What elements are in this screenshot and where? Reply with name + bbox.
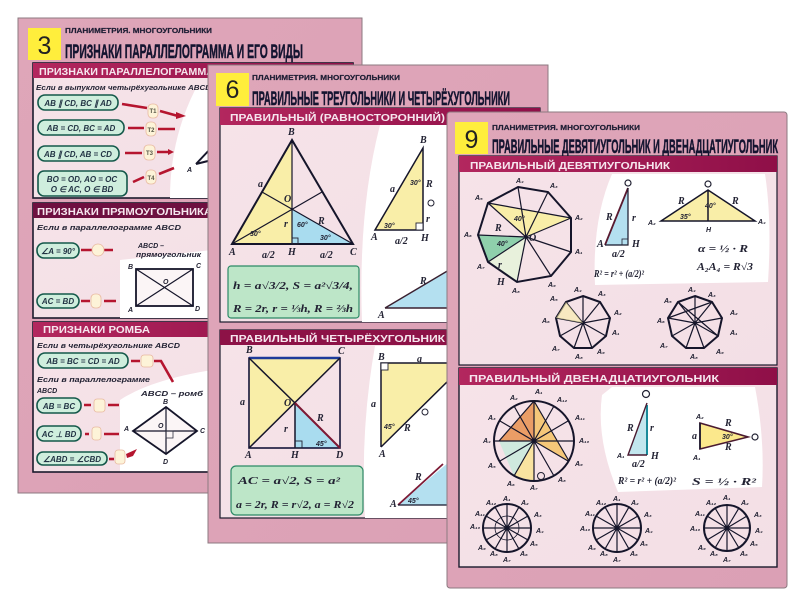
condition pill 3: AC ⊥ BD xyxy=(41,430,76,439)
right triangle diagram: A xyxy=(596,239,604,250)
small nonagon 1: A₅ xyxy=(549,296,558,303)
rhombus diagram: O xyxy=(158,423,164,430)
arrow 3 xyxy=(125,145,174,160)
formulas box xyxy=(228,266,359,318)
small blue triangle xyxy=(389,462,449,510)
small dodecagon 3: A₄ xyxy=(754,528,763,535)
small nonagon 1: A₉ xyxy=(596,349,605,356)
small dodecagon 3: A₂ xyxy=(740,500,749,507)
small nonagon 1: A₇ xyxy=(551,346,560,353)
small dodecagon 2: A₆ xyxy=(629,551,638,558)
square diagram: a xyxy=(240,397,245,408)
equilateral triangle diagram: C xyxy=(350,247,357,258)
arrow 2: T2 xyxy=(147,128,155,134)
formulas box: R = 2r, r = ⅓h, R = ⅔h xyxy=(232,304,354,315)
number badge 3 xyxy=(28,28,61,60)
isosceles triangle diagram: 40° xyxy=(704,202,716,210)
rectangle diagram: A xyxy=(127,307,133,314)
small dodecagon 2: A₄ xyxy=(644,528,653,535)
right triangle diagram: A xyxy=(370,232,378,243)
heading xyxy=(459,156,777,172)
isosceles triangle diagram: H xyxy=(706,227,712,234)
small dodecagon 3: A₁ xyxy=(722,495,731,502)
arrow xyxy=(85,427,119,440)
equilateral triangle diagram: a xyxy=(258,179,263,190)
equilateral triangle diagram: R xyxy=(317,216,325,227)
condition pill 2 xyxy=(37,294,79,308)
small nonagon 1: A₆ xyxy=(541,318,550,325)
condition pill 1 xyxy=(38,95,118,110)
poster subtitle: ПЛАНИМЕТРИЯ. МНОГОУГОЛЬНИКИ xyxy=(252,75,400,82)
small blue triangle: A xyxy=(389,499,397,510)
small blue triangle: A xyxy=(377,310,385,321)
small nonagon 2: A₆ xyxy=(656,318,665,325)
condition pill 4: ∠ABD = ∠CBD xyxy=(43,455,101,464)
arrow 3: T3 xyxy=(146,151,154,157)
condition pill 1 xyxy=(38,353,128,368)
nonagon diagram: H xyxy=(496,277,506,288)
condition text: Если в параллелограмме xyxy=(37,377,150,384)
number badge 9: 9 xyxy=(465,126,478,154)
number badge 3: 3 xyxy=(38,32,51,60)
nonagon diagram: A₁ xyxy=(574,249,583,256)
square diagram xyxy=(240,345,345,461)
small nonagon 2: A₉ xyxy=(715,349,724,356)
equilateral triangle diagram: 30° xyxy=(320,234,331,242)
isosceles triangle diagram xyxy=(692,414,758,488)
arrow 1 xyxy=(122,104,186,119)
isosceles triangle diagram: a xyxy=(692,431,697,442)
dodecagon diagram: A₇ xyxy=(529,485,538,492)
condition pill 2: AB = BC xyxy=(42,402,75,411)
heading xyxy=(220,108,540,125)
heading xyxy=(33,203,353,218)
right triangle diagram xyxy=(593,180,645,280)
small dodecagon 1: A₁ xyxy=(502,496,511,503)
condition pill 2 xyxy=(37,398,81,413)
dodecagon diagram: A₈ xyxy=(557,477,566,484)
square diagram: D xyxy=(335,450,343,461)
small blue triangle xyxy=(377,270,449,321)
formulas box xyxy=(231,466,363,515)
small dodecagon 3: A₃ xyxy=(753,512,762,519)
figure caption: ABCD – ромб xyxy=(140,390,204,398)
dodecagon diagram: A₅ xyxy=(487,463,496,470)
arrow 4 xyxy=(133,168,174,184)
heading: ПРАВИЛЬНЫЙ ЧЕТЫРЁХУГОЛЬНИК xyxy=(230,332,446,345)
small dodecagon 1: A₅ xyxy=(529,541,538,548)
nonagon diagram: R xyxy=(494,223,502,234)
small dodecagon 3: A₆ xyxy=(739,551,748,558)
right triangle diagram xyxy=(370,135,434,247)
isosceles triangle diagram: A₁ xyxy=(692,455,701,462)
formula: A₂A₄ = R√3 xyxy=(696,262,753,273)
dodecagon diagram: A₂ xyxy=(509,395,518,402)
small dodecagon 3: A₇ xyxy=(722,557,731,564)
right triangle diagram: a xyxy=(371,399,376,410)
nonagon diagram: A₉ xyxy=(547,282,556,289)
heading: ПРАВИЛЬНЫЙ ДЕВЯТИУГОЛЬНИК xyxy=(470,159,671,172)
right triangle diagram: R xyxy=(403,423,411,434)
nonagon diagram: A₂ xyxy=(574,215,583,222)
small dodecagon 1: A₆ xyxy=(519,551,528,558)
nonagon diagram: A₃ xyxy=(549,183,558,190)
right triangle diagram: R xyxy=(425,179,433,190)
poster subtitle: ПЛАНИМЕТРИЯ. МНОГОУГОЛЬНИКИ xyxy=(65,28,212,35)
right triangle diagram: H xyxy=(650,451,660,462)
rhombus diagram xyxy=(123,399,206,466)
heading xyxy=(33,322,353,337)
isosceles triangle diagram: R xyxy=(724,418,732,429)
panel: poster 6, regular triangles and quadrilaterals: ПРАВИЛЬНЫЕ ТРЕУГОЛЬНИКИ И ЧЕТЫРЁХУГОЛЬНИКИ xyxy=(252,89,510,110)
small blue triangle: 45° xyxy=(407,497,419,505)
small dodecagon 1: A₉ xyxy=(477,545,486,552)
right triangle diagram: a/2 xyxy=(612,249,625,260)
right triangle diagram: a/2 xyxy=(632,459,645,470)
square diagram: C xyxy=(338,346,345,357)
number badge 6: 6 xyxy=(226,76,239,104)
right triangle diagram: a/2 xyxy=(395,236,408,247)
nonagon diagram: 40° xyxy=(513,215,525,223)
small dodecagon 2: A₁₀ xyxy=(579,526,591,533)
small dodecagon 1 xyxy=(469,496,544,564)
small nonagon 2: A₈ xyxy=(689,354,698,361)
small nonagon 1 xyxy=(541,287,622,361)
square diagram: R xyxy=(316,413,324,424)
poster subtitle: ПЛАНИМЕТРИЯ. МНОГОУГОЛЬНИКИ xyxy=(492,125,640,132)
isosceles triangle diagram: R xyxy=(677,196,685,207)
heading: ПРИЗНАКИ РОМБА xyxy=(43,325,150,336)
small nonagon 2: A₃ xyxy=(707,292,716,299)
condition pill 1: ∠A = 90° xyxy=(41,247,76,256)
formula: S = ½ · R² xyxy=(692,477,758,488)
equilateral triangle diagram: B xyxy=(287,127,295,138)
small nonagon 1: A₃ xyxy=(597,291,606,298)
dodecagon diagram: A₃ xyxy=(487,415,496,422)
condition pill 2: AB = CD, BC = AD xyxy=(46,124,116,133)
right triangle diagram: a xyxy=(390,184,395,195)
nonagon diagram: A₆ xyxy=(463,232,472,239)
nonagon diagram: r xyxy=(498,260,502,271)
small nonagon 1: A₂ xyxy=(613,310,622,317)
equilateral triangle diagram: 30° xyxy=(250,230,261,238)
small dodecagon 2: A₁₁ xyxy=(584,511,596,518)
condition pill 1 xyxy=(37,243,79,258)
isosceles triangle diagram: A₂ xyxy=(647,220,656,227)
nonagon diagram: 40° xyxy=(496,240,508,248)
condition pill 1: AB = BC = CD = AD xyxy=(45,357,120,366)
formula: R² = r² + (a/2)² xyxy=(617,476,677,487)
small nonagon 2: A₂ xyxy=(729,310,738,317)
isosceles triangle diagram: A₂ xyxy=(695,414,704,421)
panel: regular triangle xyxy=(220,108,540,322)
equilateral triangle diagram: a/2 xyxy=(320,250,333,261)
small dodecagon 2: A₈ xyxy=(599,551,608,558)
panel: regular dodecagon xyxy=(459,368,777,567)
small dodecagon 1: A₂ xyxy=(520,500,529,507)
nonagon diagram: A₄ xyxy=(515,178,524,185)
right triangle diagram xyxy=(616,390,677,487)
parallelogram fragment: A xyxy=(186,167,192,174)
dodecagon diagram: A₄ xyxy=(482,438,491,445)
small dodecagon 1: A₁₁ xyxy=(474,511,486,518)
small dodecagon 2: A₂ xyxy=(630,500,639,507)
small blue triangle: R xyxy=(414,472,422,483)
right triangle diagram: 30° xyxy=(410,179,421,187)
number badge 6 xyxy=(216,73,249,106)
right triangle diagram: A xyxy=(378,449,386,460)
square diagram: A xyxy=(244,450,252,461)
isosceles triangle diagram: 35° xyxy=(680,213,691,221)
small dodecagon 3: A₁₁ xyxy=(694,511,706,518)
nonagon diagram xyxy=(463,178,583,295)
small dodecagon 1: A₄ xyxy=(535,528,544,535)
small dodecagon 1: A₈ xyxy=(489,551,498,558)
rectangle diagram xyxy=(127,263,202,314)
arrow 1: T1 xyxy=(149,109,157,115)
dodecagon diagram: A₁₁ xyxy=(574,415,586,422)
number badge 9 xyxy=(455,122,488,154)
condition text: ABCD xyxy=(36,388,57,395)
condition pill 4: O ∈ AC, O ∈ BD xyxy=(51,185,113,194)
heading: ПРАВИЛЬНЫЙ (РАВНОСТОРОННИЙ) xyxy=(230,111,445,124)
small nonagon 2: A₇ xyxy=(659,343,668,350)
small dodecagon 3: A₅ xyxy=(749,541,758,548)
small nonagon 1: A₁ xyxy=(611,330,620,337)
formulas box: AC = a√2, S = a² xyxy=(237,476,341,487)
equilateral triangle diagram: 60° xyxy=(297,221,308,229)
panel: parallelogram signs xyxy=(33,63,353,198)
dodecagon diagram: A₁₀ xyxy=(578,438,590,445)
small dodecagon 2 xyxy=(579,496,653,564)
rectangle diagram: D xyxy=(195,306,200,313)
nonagon diagram: A₅ xyxy=(474,195,483,202)
small dodecagon 2: A₁ xyxy=(612,496,621,503)
dodecagon diagram: A₉ xyxy=(574,461,583,468)
rectangle diagram: C xyxy=(196,263,202,270)
condition pill 3: AB ∥ CD, AB = CD xyxy=(43,150,112,159)
poster title: ПРИЗНАКИ ПАРАЛЛЕЛОГРАММА И ЕГО ВИДЫ xyxy=(65,42,303,63)
right triangle diagram: a xyxy=(417,354,422,365)
right triangle diagram: H xyxy=(420,233,430,244)
condition text: Если в четырёхугольнике ABCD xyxy=(37,343,180,350)
isosceles triangle diagram: A₄ xyxy=(757,219,766,226)
condition pill 4 xyxy=(38,171,127,196)
panel: regular nonagon xyxy=(459,156,777,365)
parallelogram fragment xyxy=(186,147,212,174)
arrow to rhombus xyxy=(131,355,173,382)
heading xyxy=(33,63,353,78)
panel: poster 3, parallelogram signs xyxy=(18,18,362,493)
heading: ПРИЗНАКИ ПАРАЛЛЕЛОГРАММА xyxy=(39,67,214,78)
arrow 4: T4 xyxy=(147,176,155,182)
equilateral triangle diagram: a/2 xyxy=(262,250,275,261)
condition pill 2 xyxy=(38,120,124,135)
rhombus diagram: A xyxy=(123,426,129,433)
small dodecagon 3: A₁₂ xyxy=(705,500,717,507)
heading xyxy=(459,368,777,385)
right triangle diagram: r xyxy=(650,423,654,434)
isosceles triangle diagram: R xyxy=(724,442,732,453)
heading xyxy=(220,330,540,345)
condition pill 3 xyxy=(37,426,81,441)
condition pill 4 xyxy=(37,452,107,465)
arrow xyxy=(84,399,119,412)
heading: ПРАВИЛЬНЫЙ ДВЕНАДЦАТИУГОЛЬНИК xyxy=(469,372,720,385)
small nonagon 2: A₄ xyxy=(687,287,696,294)
small dodecagon 2: A₃ xyxy=(643,512,652,519)
small dodecagon 1: A₇ xyxy=(502,557,511,564)
square diagram: B xyxy=(245,345,253,356)
isosceles triangle diagram: 30° xyxy=(722,433,733,441)
square diagram: r xyxy=(284,424,288,435)
heading: ПРИЗНАКИ ПРЯМОУГОЛЬНИКА xyxy=(37,207,212,218)
arrow xyxy=(109,449,137,464)
right triangle diagram: B xyxy=(377,352,385,363)
small nonagon 2 xyxy=(656,287,738,361)
right triangle diagram xyxy=(371,352,449,460)
rhombus diagram: C xyxy=(200,428,206,435)
equilateral triangle diagram: O xyxy=(284,194,291,205)
small dodecagon 1: A₁₀ xyxy=(469,524,481,531)
small nonagon 1: A₈ xyxy=(574,354,583,361)
condition pill 4: BO = OD, AO = OC xyxy=(47,175,117,184)
small dodecagon 1: A₁₂ xyxy=(485,500,497,507)
small dodecagon 1: A₃ xyxy=(533,512,542,519)
equilateral triangle diagram xyxy=(228,127,357,261)
nonagon diagram: A₈ xyxy=(511,288,520,295)
square diagram: 45° xyxy=(315,440,327,448)
right triangle diagram: H xyxy=(631,239,641,250)
rhombus diagram: D xyxy=(163,459,168,466)
rhombus diagram: B xyxy=(163,399,168,406)
dodecagon diagram xyxy=(482,389,590,492)
panel: rectangle signs xyxy=(33,203,353,318)
dodecagon diagram: A₁ xyxy=(534,389,543,396)
small dodecagon 2: A₅ xyxy=(639,541,648,548)
condition text: Если в выпуклом четырёхугольнике ABCD xyxy=(36,85,211,92)
panel: regular quadrilateral xyxy=(220,330,540,518)
figure caption: ABCD – xyxy=(137,243,164,250)
condition pill 2: AC = BD xyxy=(41,297,74,306)
small dodecagon 2: A₁₂ xyxy=(595,500,607,507)
small nonagon 2: A₅ xyxy=(663,298,672,305)
formulas box: a = 2r, R = r√2, a = R√2 xyxy=(236,500,354,511)
panel: rhombus signs xyxy=(33,322,353,472)
equilateral triangle diagram: r xyxy=(284,219,288,230)
small dodecagon 2: A₇ xyxy=(612,557,621,564)
isosceles triangle diagram xyxy=(647,181,766,273)
formula: α = ½ · R xyxy=(698,244,748,255)
formula: R² = r² + (a/2)² xyxy=(593,269,645,280)
right triangle diagram: R xyxy=(605,212,613,223)
equilateral triangle diagram: A xyxy=(228,247,236,258)
condition text xyxy=(36,377,150,395)
small nonagon 1: A₄ xyxy=(573,287,582,294)
panel: poster 6, regular triangles and quadrilaterals xyxy=(208,65,548,543)
condition text: Если в параллелограмме ABCD xyxy=(37,225,181,232)
right triangle diagram: r xyxy=(632,213,636,224)
condition pill 3 xyxy=(38,146,119,161)
condition pill 1: AB ∥ CD, BC ∥ AD xyxy=(43,99,112,108)
right triangle diagram: 45° xyxy=(383,423,395,431)
arrow xyxy=(81,294,116,308)
square diagram: H xyxy=(290,450,300,461)
small blue triangle: R xyxy=(419,276,427,287)
small dodecagon 3 xyxy=(689,495,763,564)
dodecagon diagram: A₆ xyxy=(506,481,515,488)
equilateral triangle diagram: H xyxy=(287,247,297,258)
small nonagon 2: A₁ xyxy=(729,330,738,337)
arrow 2 xyxy=(128,122,175,136)
nonagon diagram: A₇ xyxy=(476,264,485,271)
nonagon diagram: O xyxy=(529,233,536,244)
small dodecagon 3: A₉ xyxy=(697,545,706,552)
isosceles triangle diagram: R xyxy=(731,196,739,207)
figure caption: прямоугольник xyxy=(136,252,202,259)
square diagram: O xyxy=(284,398,291,409)
small dodecagon 2: A₉ xyxy=(587,545,596,552)
rectangle diagram: O xyxy=(163,279,169,286)
right triangle diagram: A₁ xyxy=(616,453,625,460)
right triangle diagram: R xyxy=(626,423,634,434)
dodecagon diagram: A₁₂ xyxy=(556,397,568,404)
small dodecagon 3: A₁₀ xyxy=(689,526,701,533)
small dodecagon 3: A₈ xyxy=(709,551,718,558)
right triangle diagram: 30° xyxy=(384,222,395,230)
panel: poster 9, regular nonagon and dodecagon xyxy=(447,112,787,588)
rectangle diagram: B xyxy=(128,264,133,271)
right triangle diagram: B xyxy=(419,135,427,146)
right triangle diagram: r xyxy=(426,214,430,225)
formulas box: h = a√3/2, S = a²√3/4, xyxy=(233,281,353,292)
arrow xyxy=(81,244,113,256)
